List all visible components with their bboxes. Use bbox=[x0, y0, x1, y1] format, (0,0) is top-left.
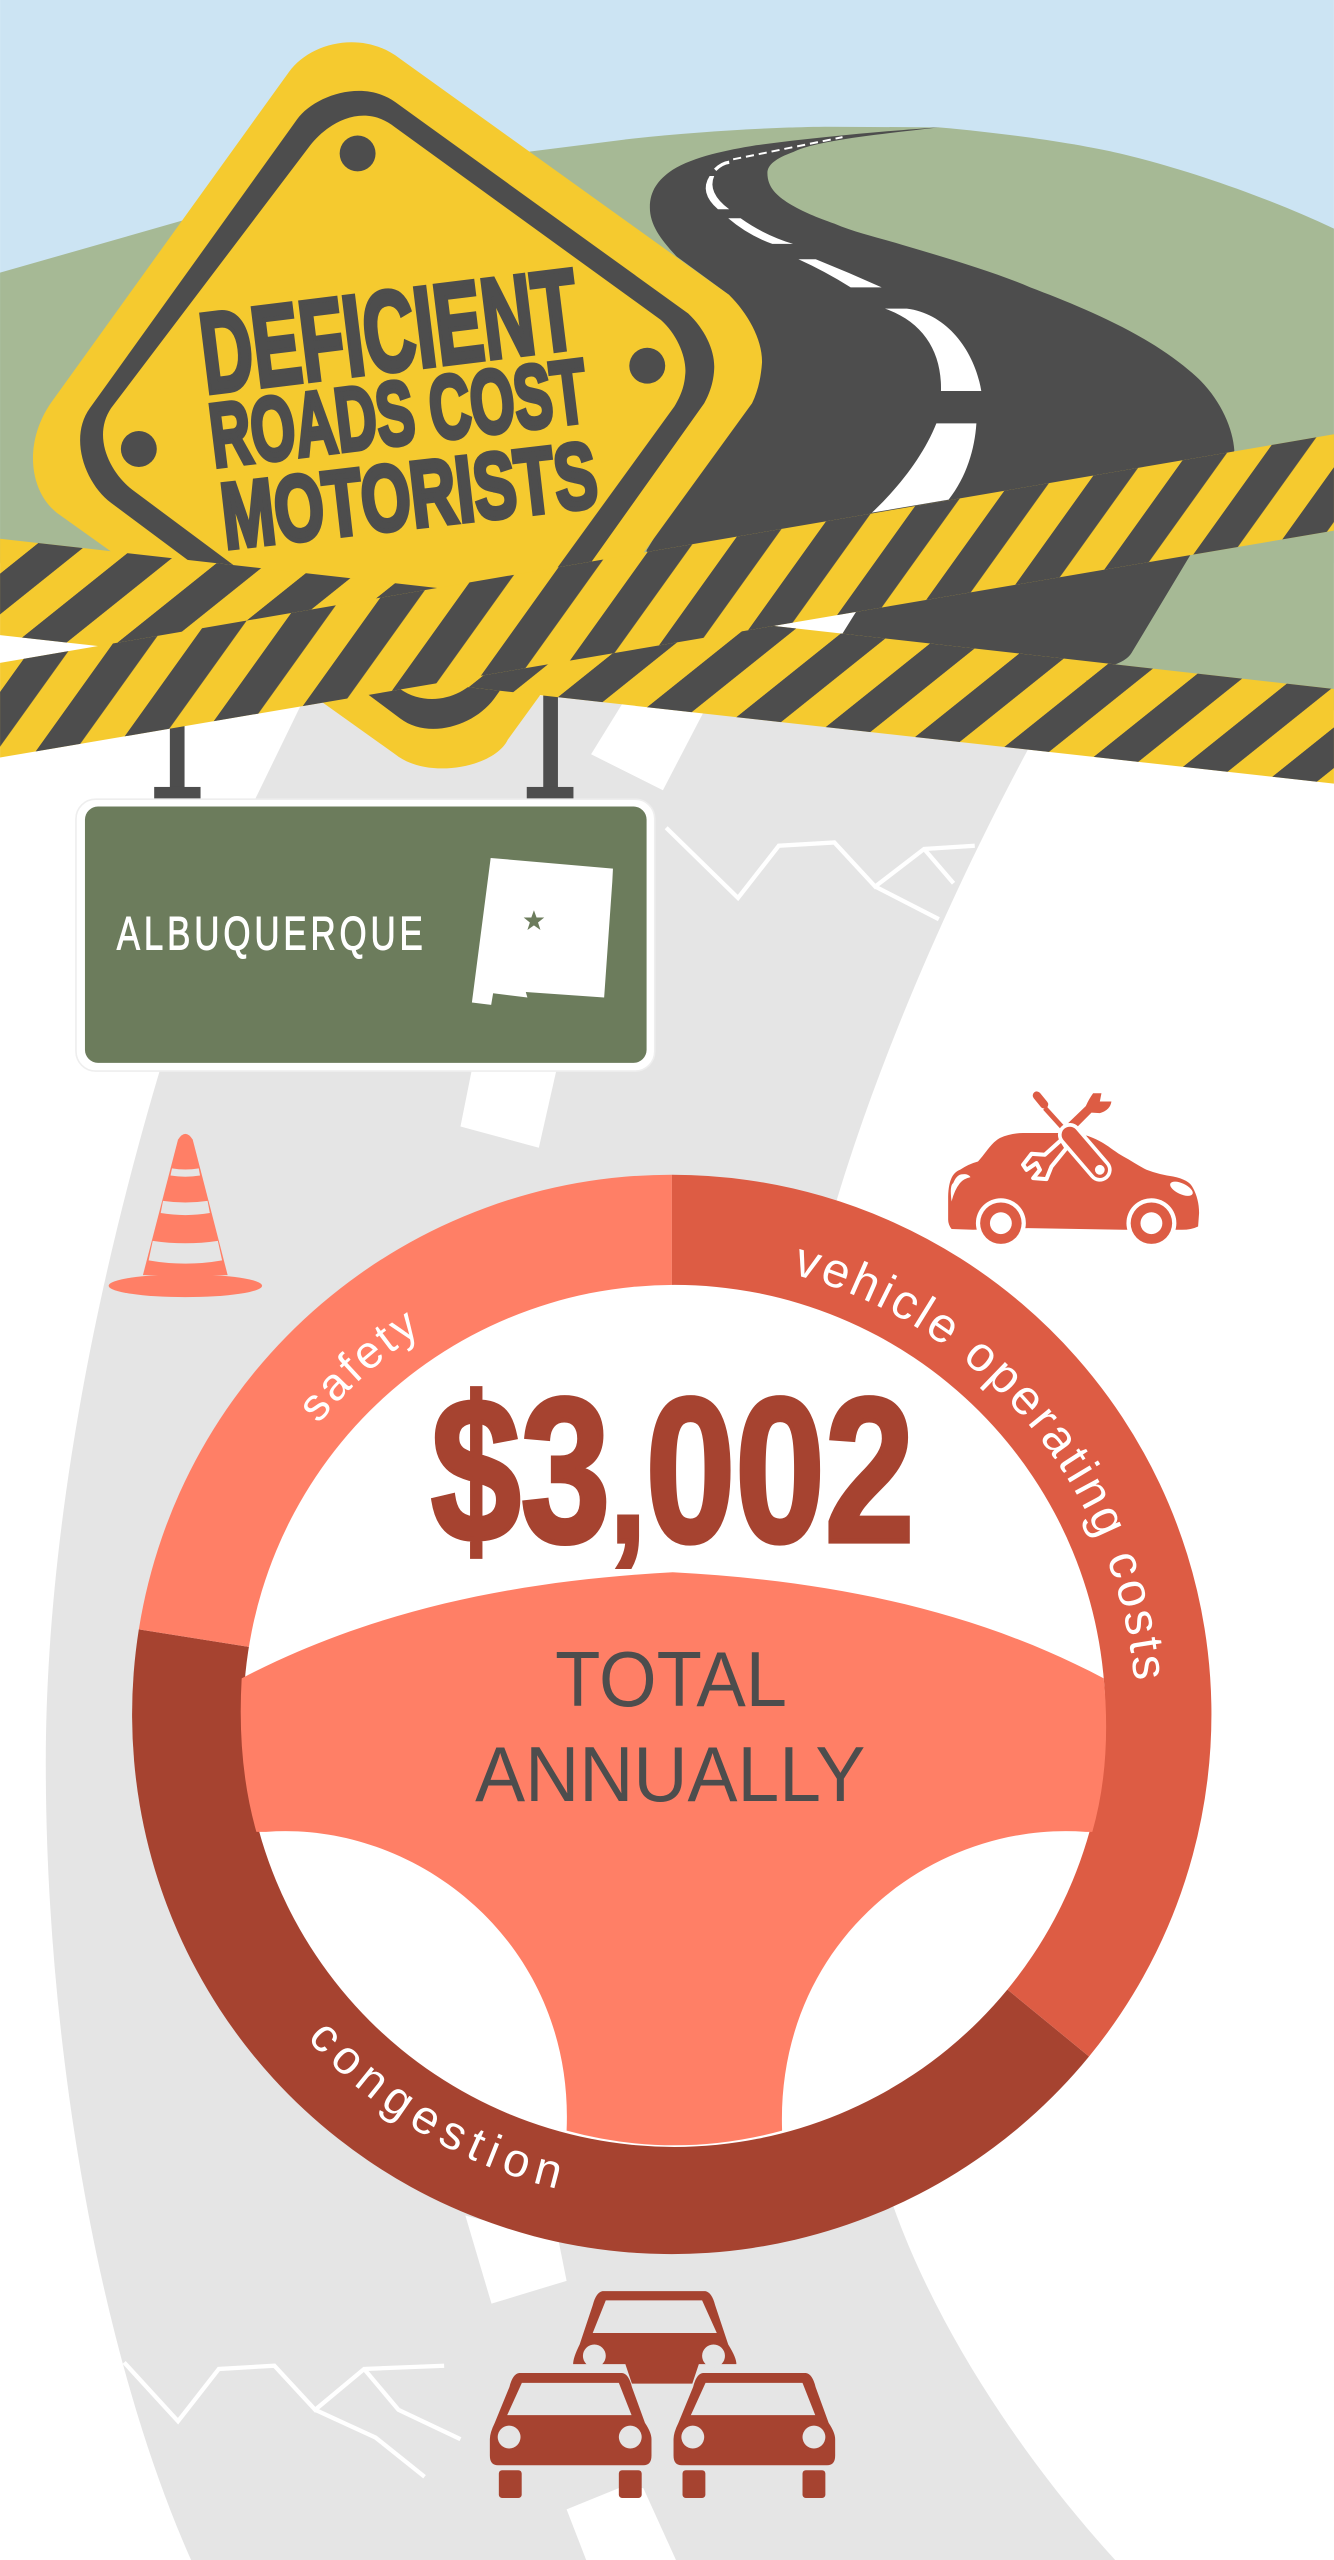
front right car bbox=[674, 2373, 835, 2498]
label: vehicle operating costs: vehicle operating costs bbox=[799, 1249, 1162, 1679]
title: DEFICIENT bbox=[193, 246, 585, 418]
road crack bottom bbox=[124, 2362, 460, 2477]
total annually caption: ANNUALLY bbox=[475, 1730, 865, 1818]
icon: car with tools bbox=[948, 1093, 1199, 1248]
winding dark road bbox=[647, 127, 1234, 669]
sign post left bbox=[154, 686, 201, 799]
icon: traffic congestion cars bbox=[490, 2291, 835, 2498]
steering wheel chart bbox=[132, 1174, 1212, 2254]
icon: New Mexico state bbox=[472, 858, 613, 1005]
ring: safety bbox=[139, 1175, 672, 1714]
sky bbox=[0, 0, 1334, 563]
green city sign bbox=[76, 799, 655, 1071]
back car bbox=[573, 2291, 736, 2384]
road lane markings bbox=[706, 137, 981, 633]
screwdriver bbox=[1037, 1096, 1105, 1175]
city name: ALBUQUERQUE bbox=[117, 906, 427, 960]
title: MOTORISTS bbox=[216, 422, 602, 568]
label: congestion: congestion bbox=[312, 2026, 560, 2188]
sign post right bbox=[527, 686, 573, 799]
total annually caption bbox=[475, 1635, 865, 1818]
icon: traffic cone bbox=[109, 1134, 262, 1297]
road centre dashes bbox=[460, 699, 705, 2560]
caution tape descending bbox=[0, 539, 1334, 784]
total annually caption: TOTAL bbox=[555, 1635, 787, 1723]
grey road background bbox=[46, 686, 1115, 2560]
wheel centre bbox=[243, 1285, 1105, 2147]
ring: congestion bbox=[132, 1629, 1089, 2254]
title: ROADS COST bbox=[204, 341, 592, 487]
caution tape ascending bbox=[0, 434, 1334, 758]
road crack top bbox=[666, 828, 975, 919]
label: safety: safety bbox=[304, 1312, 414, 1420]
front left car bbox=[490, 2373, 651, 2498]
ring: vehicle operating costs bbox=[672, 1175, 1211, 2056]
wrench bbox=[1023, 1093, 1111, 1179]
total amount: $3,002 bbox=[431, 1355, 914, 1585]
title bbox=[193, 246, 602, 568]
wheel spoke bbox=[241, 1572, 1106, 2145]
yellow warning diamond sign bbox=[33, 42, 762, 768]
green hills bbox=[0, 127, 1334, 710]
